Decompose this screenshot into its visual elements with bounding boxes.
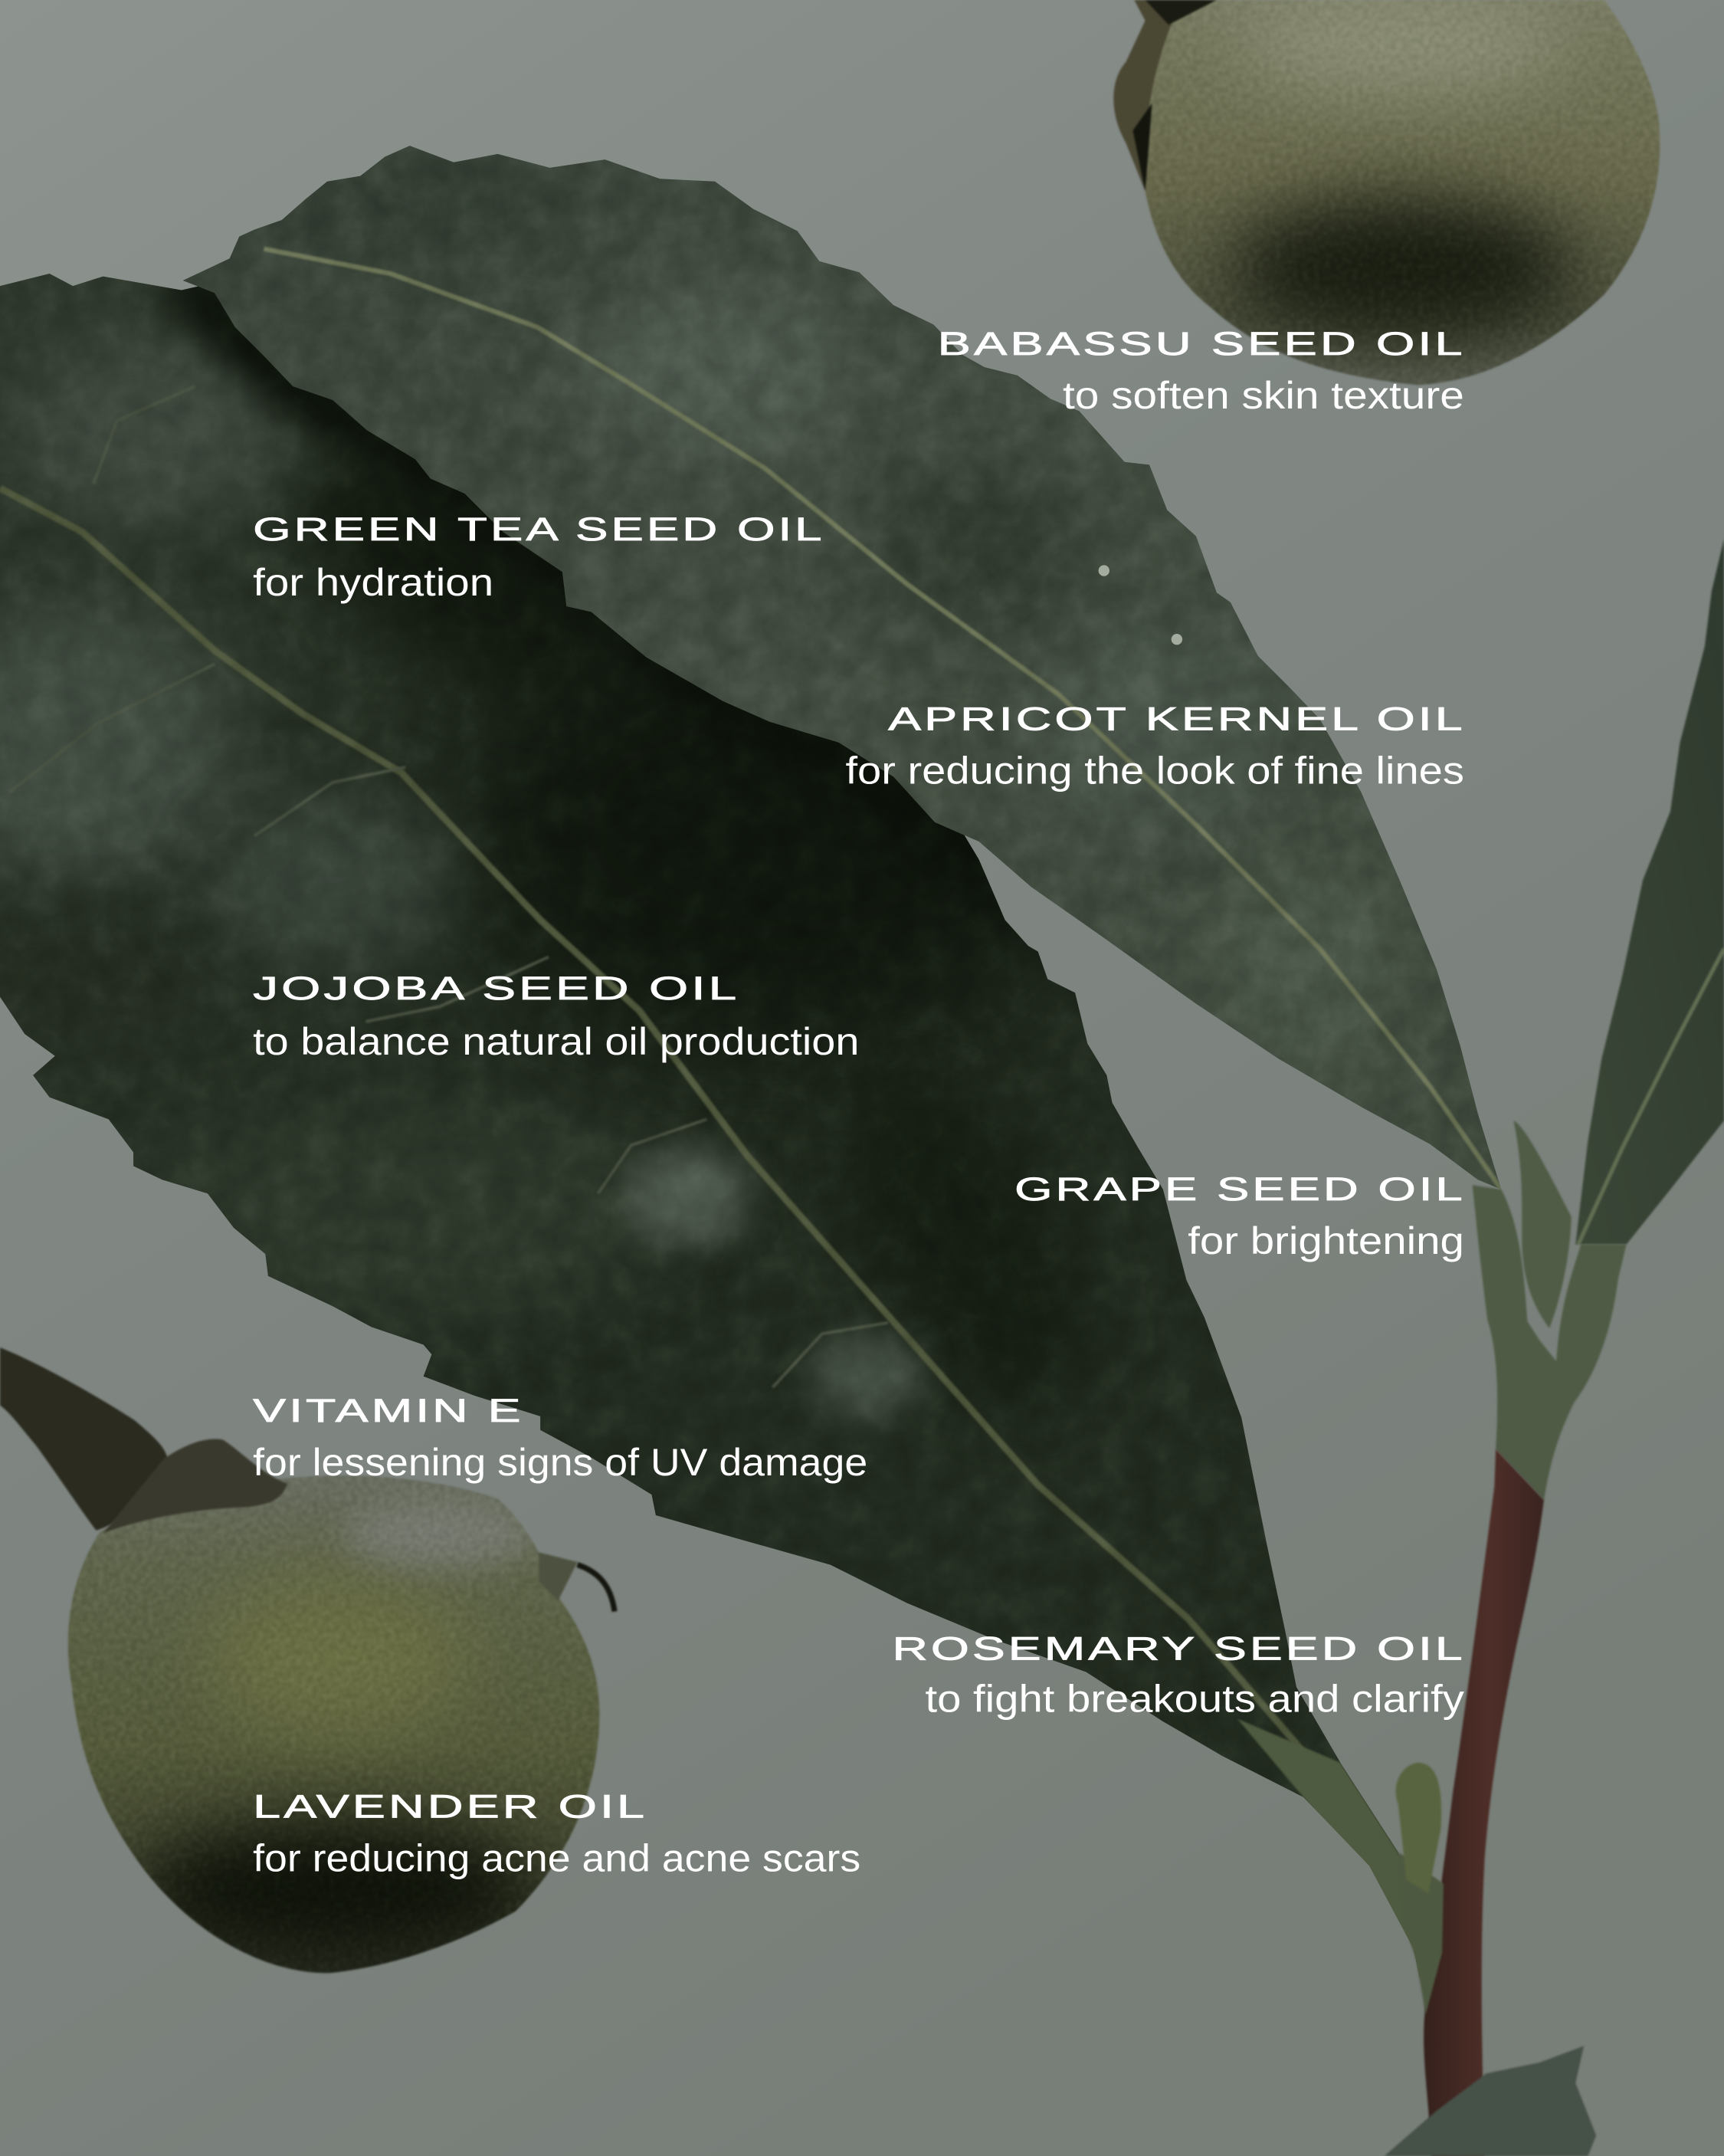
ingredient: apricot kernel oil: for reducing the look of fine lines xyxy=(845,750,1464,793)
ingredient: grape seed oil: GRAPE SEED OIL xyxy=(1014,1171,1466,1208)
big leaf xyxy=(0,274,1421,1979)
ingredient: green tea seed oil: for hydration xyxy=(253,561,493,604)
main brown stem xyxy=(1424,1449,1544,2156)
ingredient: jojoba seed oil xyxy=(253,970,859,1063)
ingredient: lavender oil: LAVENDER OIL xyxy=(253,1789,647,1826)
ingredient: rosemary seed oil: to fight breakouts and clarify xyxy=(926,1678,1465,1721)
ingredient: babassu seed oil: to soften skin texture xyxy=(1063,374,1464,417)
top fruit xyxy=(1100,0,1677,399)
upper leaf xyxy=(183,146,1501,1190)
ingredient: vitamin e xyxy=(253,1393,867,1484)
right leaf xyxy=(1575,539,1724,1245)
ingredient: apricot kernel oil xyxy=(845,701,1466,793)
ingredient: grape seed oil: for brightening xyxy=(1188,1219,1464,1262)
ingredient: lavender oil: for reducing acne and acne scars xyxy=(253,1837,860,1880)
bottom fruit xyxy=(55,1439,615,1980)
ingredient: babassu seed oil: BABASSU SEED OIL xyxy=(938,326,1466,363)
bottom fruit stalk xyxy=(0,1347,168,1531)
ingredient: green tea seed oil xyxy=(253,511,825,604)
ingredient: green tea seed oil: GREEN TEA SEED OIL xyxy=(253,511,825,548)
ingredient: jojoba seed oil: to balance natural oil production xyxy=(253,1020,859,1063)
lower petiole node and bud xyxy=(1396,1763,1444,2014)
ingredient: rosemary seed oil: ROSEMARY SEED OIL xyxy=(892,1630,1466,1667)
ingredient: rosemary seed oil xyxy=(892,1630,1466,1721)
ingredient: apricot kernel oil: APRICOT KERNEL OIL xyxy=(888,701,1466,738)
ingredient: vitamin e: for lessening signs of UV damage xyxy=(253,1441,867,1484)
ingredient: vitamin e: VITAMIN E xyxy=(253,1393,524,1429)
ingredient: jojoba seed oil: JOJOBA SEED OIL xyxy=(253,970,739,1007)
ingredient: babassu seed oil xyxy=(938,326,1466,417)
bottom leaf fragment xyxy=(1385,2046,1596,2156)
upper green node and bud xyxy=(1473,1121,1627,1500)
ingredient: lavender oil xyxy=(253,1789,860,1880)
ingredient: grape seed oil xyxy=(1014,1171,1466,1262)
